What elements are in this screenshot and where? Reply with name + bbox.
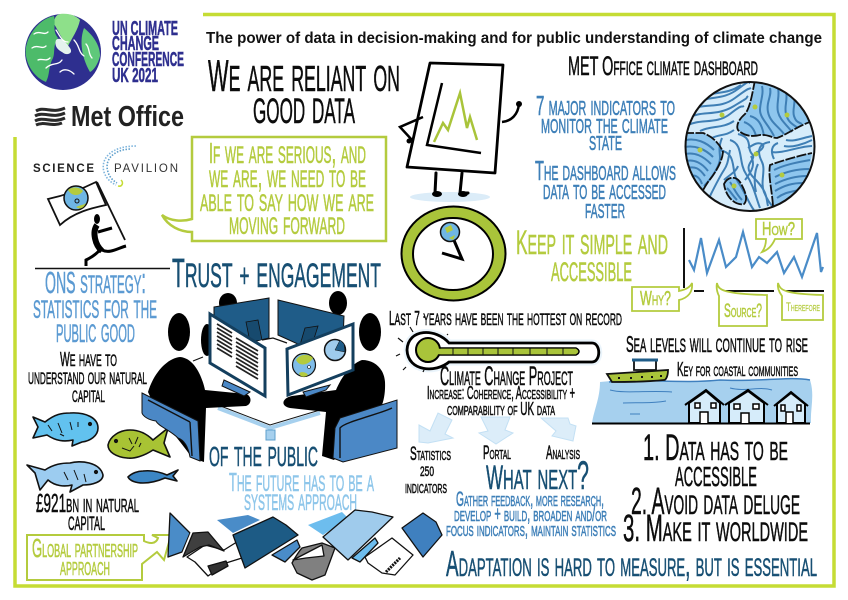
heading: climate change project [427, 361, 575, 419]
callout: source: Source? [724, 301, 762, 322]
logo text: UN Climate Change Conference UK 2021: CONFERENCE [112, 49, 184, 71]
heading: keep it simple [516, 219, 668, 290]
text: portal: Portal [483, 443, 511, 464]
icons: three arrows [419, 413, 576, 444]
text: next steps: develop + build, broaden and/or [454, 503, 607, 526]
logo text: UN Climate Change Conference UK 2021 [112, 18, 184, 87]
callout: how [756, 219, 802, 252]
text: seven major indicators: state [589, 125, 622, 156]
text: understand natural capital [28, 345, 147, 408]
logo: Met Office: Met Office [71, 101, 184, 133]
heading: we are reliant on good data: We are reliant on [208, 45, 400, 103]
callout: global partnership approach: approach [60, 551, 110, 581]
text: next steps: focus indicators, maintain statistics [446, 518, 616, 541]
heading: climate change project: comparability of UK data [447, 399, 555, 419]
text: understand natural capital: We have to [60, 345, 117, 372]
logo text: UN Climate Change Conference UK 2021: CHANGE [112, 33, 159, 55]
icon: climate map globe [684, 80, 816, 212]
text: statistics for the [33, 285, 157, 326]
callout: why: Why? [640, 288, 671, 310]
logo: Science Pavilion [33, 146, 178, 186]
line chart with question callouts [632, 219, 824, 326]
text: the future is a systems approach [229, 463, 374, 517]
text: understand our natural [28, 363, 147, 390]
illustration: walking document with chart [400, 63, 522, 202]
heading: climate change project: Increase: Coherence, Accessibility + [427, 383, 575, 403]
text: dashboard faster access: data to be accessed [543, 174, 666, 205]
logo text: UN Climate Change Conference UK 2021: UK 2021 [112, 65, 158, 87]
illustration: flooded coast [592, 360, 812, 424]
icon: house three [774, 392, 808, 423]
callout: source [717, 283, 767, 326]
text: analysis: Analysis [546, 443, 580, 464]
text: natural capital value: capital [68, 506, 105, 536]
icon: fish group [27, 413, 178, 492]
text: last 7 years hottest: Last 7 years have been the hottest on record [389, 304, 622, 331]
text: dashboard faster access: faster [585, 193, 625, 224]
icon: runner with globe flag [35, 182, 170, 268]
text: the future is a systems approach: systems approach [244, 482, 357, 517]
heading: ONS strategy: ONS strategy: [45, 260, 146, 301]
text: seven major indicators [536, 90, 675, 156]
heading: what next: What next? [486, 454, 589, 498]
callout: therefore: Therefore [786, 300, 820, 314]
text: natural capital value [36, 488, 139, 536]
logo: Met Office [35, 101, 184, 133]
text: statistics 250 indicators: 250 [420, 463, 434, 479]
callout: if we are serious: we are, we need to be [209, 157, 366, 195]
callout: why [632, 283, 692, 311]
heading: keep it simple: Keep it simple and [516, 219, 668, 263]
logo: UN Climate Change Conference globe [25, 14, 101, 90]
text: dashboard faster access [535, 155, 676, 224]
heading: ONS strategy: public good [56, 309, 135, 350]
text: of the public [209, 431, 318, 475]
text: three key points: accessible [675, 451, 757, 495]
heading: keep it simple: accessible [551, 248, 632, 290]
logo: Science Pavilion: SCIENCE [33, 163, 94, 175]
icon: house two [725, 390, 768, 423]
heading: ONS strategy [33, 260, 157, 350]
logo: Science Pavilion: PAVILION [114, 163, 178, 175]
icon: boat [607, 360, 668, 382]
callout: if we are serious: able to say how we are [200, 181, 374, 219]
callout: global partnership approach: Global partnership [32, 533, 138, 563]
text: Climate Change Project [440, 361, 573, 391]
heading: trust and engagement: Trust + engagement [172, 245, 381, 298]
text: the future is a systems approach: The future has to be a [229, 463, 374, 498]
callout: therefore [778, 283, 823, 320]
callout: if we are serious: If we are serious, and [209, 133, 366, 171]
heading: we are reliant on good data [208, 45, 400, 134]
callout: if we are serious: moving forward [229, 204, 345, 242]
title: The power of data in decision-making and for public understanding of climate change [206, 30, 822, 47]
text: understand natural capital: capital [72, 381, 105, 408]
text: seven major indicators: monitor the climate [541, 108, 668, 139]
text: three key points [623, 427, 808, 550]
callout: how: How? [762, 219, 795, 239]
text: next steps [446, 488, 616, 541]
illustration: handshakes [168, 510, 442, 580]
heading: we are reliant on good data: good data [253, 78, 355, 134]
icon: house one [685, 390, 724, 423]
text: statistics 250 indicators: indicators [405, 477, 447, 498]
text: statistics 250 indicators [405, 444, 451, 498]
text: next steps: Gather feedback, more research, [456, 488, 604, 511]
icon: thermometer [396, 316, 599, 372]
text: seven major indicators: 7 major indicators to [536, 90, 675, 121]
callout: if we are serious [162, 133, 386, 242]
illustration: people at computers [142, 291, 397, 462]
logo text: UN Climate Change Conference UK 2021: UN CLIMATE [112, 18, 178, 40]
callout: global partnership approach [27, 533, 171, 581]
text: statistics 250 indicators: Statistics [410, 444, 451, 465]
icon: clock with globe [402, 206, 506, 300]
text: dashboard faster access: The dashboard allows [535, 155, 676, 186]
text: natural capital value: £921bn in natural [36, 488, 139, 518]
